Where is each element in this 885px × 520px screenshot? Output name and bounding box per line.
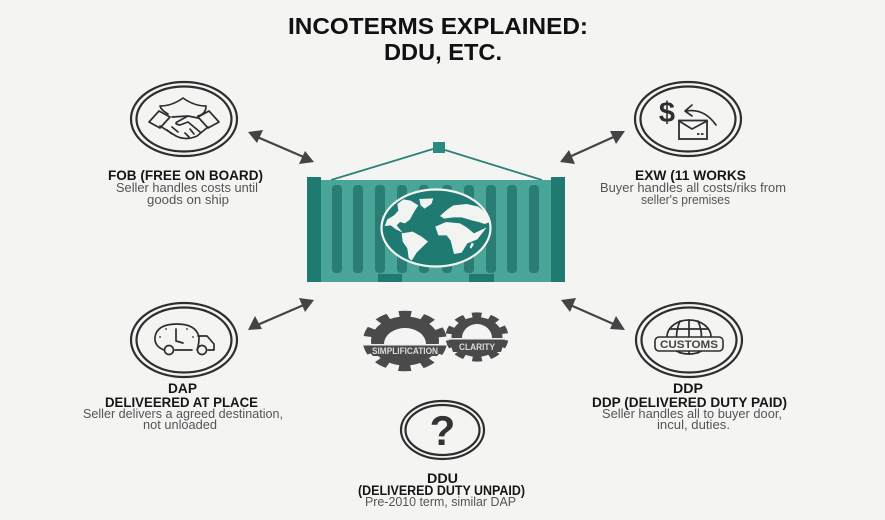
small gear [446, 313, 508, 361]
DDP heading: DDP (DELIVERED DUTY PAID) [592, 395, 787, 410]
large gear [363, 311, 447, 371]
small gear: CLARITY [459, 342, 496, 353]
arrow: EXW to container [560, 131, 625, 164]
title [288, 13, 588, 65]
gears: simplification and clarity [363, 311, 508, 371]
icon: dollar and parcel: $ [659, 97, 675, 129]
DAP description: not unloaded [143, 418, 217, 432]
icon: question mark: ? [430, 407, 455, 454]
shipping container [307, 142, 565, 282]
arrow: FOB to container [248, 130, 314, 164]
large gear: SIMPLIFICATION [372, 346, 438, 357]
FOB description [116, 181, 258, 207]
panel: FOB [108, 82, 263, 207]
arrow: DAP to container [248, 298, 314, 330]
FOB heading: FOB (FREE ON BOARD) [108, 168, 263, 183]
panel: DDU [358, 401, 525, 509]
FOB description: Seller handles costs until [116, 181, 258, 195]
DDP description: incul, duties. [657, 418, 730, 432]
DAP description: Seller delivers a agreed destination, [83, 407, 283, 421]
DDP description [602, 407, 782, 432]
panel: DDP [592, 303, 787, 432]
DAP heading [105, 381, 258, 410]
DDU heading: DDU [427, 471, 458, 486]
crane cables [331, 149, 542, 180]
arrow: DDP to container [561, 298, 625, 330]
DDU heading: (DELIVERED DUTY UNPAID) [358, 483, 525, 498]
EXW description: Buyer handles all costs/riks from [600, 181, 786, 195]
corrugated ribs [332, 185, 539, 273]
DDP heading [592, 381, 787, 410]
icon: question mark [401, 401, 484, 459]
panel: DAP [83, 303, 283, 432]
DDU heading [358, 471, 525, 498]
hook block [433, 142, 445, 153]
DAP description [83, 407, 283, 432]
container body [321, 180, 551, 282]
title: INCOTERMS EXPLAINED: [288, 13, 588, 39]
icon: dollar and parcel [635, 82, 741, 156]
title: DDU, ETC. [384, 39, 502, 65]
globe [382, 190, 490, 266]
EXW heading: EXW (11 WORKS [635, 168, 746, 183]
icon: customs globe: CUSTOMS [660, 339, 718, 351]
DDP description: Seller handles all to buyer door, [602, 407, 782, 421]
EXW description: seller's premises [641, 193, 730, 207]
EXW description [600, 181, 786, 207]
panel: EXW [600, 82, 786, 207]
DAP heading: DELIVEERED AT PLACE [105, 395, 258, 410]
icon: customs globe [636, 303, 742, 377]
DDP heading: DDP [673, 381, 703, 396]
corner posts [307, 177, 565, 282]
DDU description: Pre-2010 term, similar DAP [365, 495, 516, 509]
icon: clock and truck [131, 303, 237, 377]
DAP heading: DAP [168, 381, 197, 396]
icon: handshake with shield [131, 82, 237, 156]
FOB description: goods on ship [147, 193, 229, 207]
